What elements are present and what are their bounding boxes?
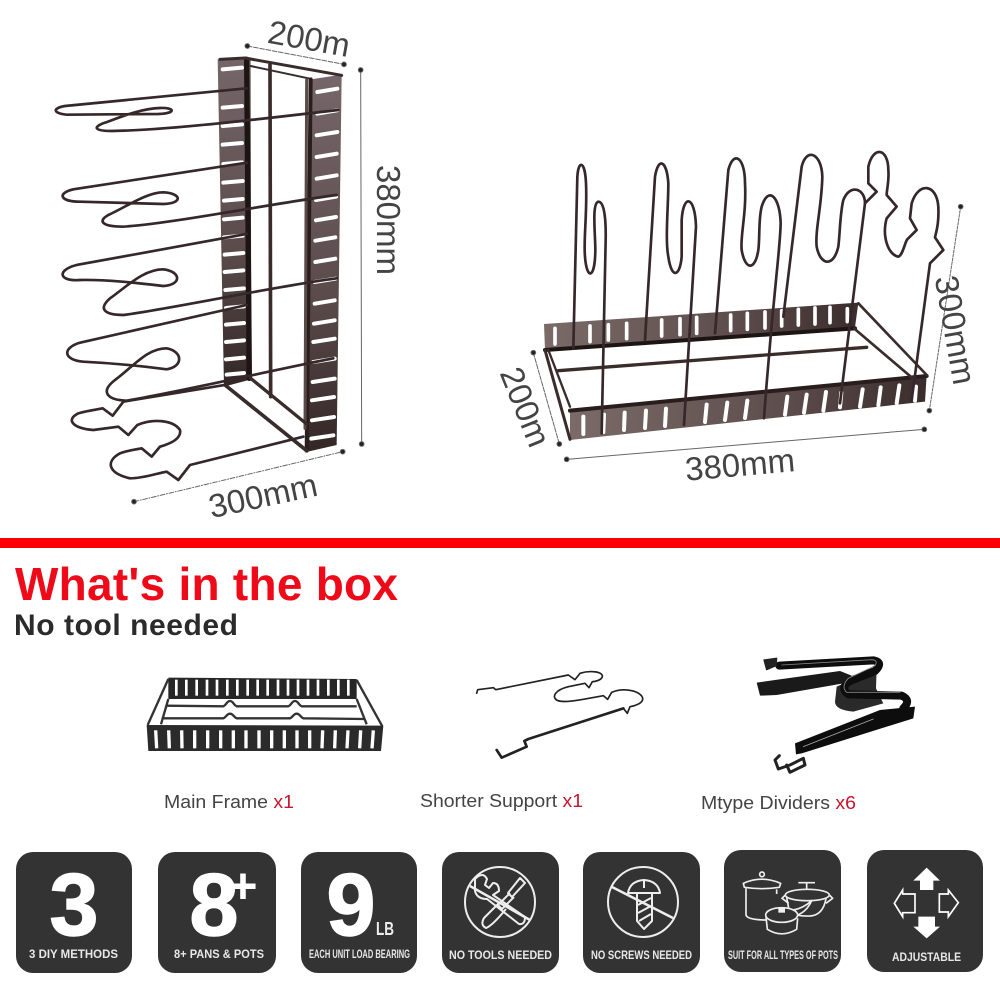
badge: 8+ pans and pots: + — [228, 858, 258, 914]
label: shorter support: Shorter Support x1 — [420, 791, 583, 811]
dimension label: 380mm: 380mm — [684, 441, 796, 488]
badge: 9 lb load bearing: LB — [376, 919, 394, 939]
panel: shorter support item — [420, 672, 643, 811]
icon: crossed tools in prohibition circle — [465, 867, 535, 937]
badge: 8+ pans and pots: 8+ PANS & POTS — [174, 949, 264, 961]
dimension lines — [531, 204, 963, 462]
icon: four-way arrows — [894, 868, 958, 938]
badge: suit for all types of pots — [724, 850, 841, 972]
label: main frame: Main Frame x1 — [164, 792, 294, 812]
icon: m-type dividers — [757, 658, 915, 772]
dimension label: 200m: 200m — [493, 362, 558, 452]
icon: pots — [743, 872, 833, 934]
badge: suit for all types of pots: SUIT FOR ALL TYPES OF POTS — [728, 950, 838, 962]
badge: no screws needed: NO SCREWS NEEDED — [591, 950, 692, 962]
badge: 3 DIY methods: 3 DIY METHODS — [29, 949, 118, 961]
badge: no tools needed — [442, 852, 559, 973]
rack front panel — [570, 375, 927, 440]
dimension label: 300mm: 300mm — [928, 273, 983, 387]
label: m-type dividers: Mtype Dividers x6 — [701, 793, 856, 813]
badge: adjustable: ADJUSTABLE — [892, 952, 961, 964]
title: What's in the box — [15, 558, 398, 610]
dimension label: 300mm: 300mm — [205, 466, 321, 525]
rack wire dividers — [573, 152, 943, 433]
dimension label: 380mm: 380mm — [370, 165, 407, 275]
badge: no tools needed: NO TOOLS NEEDED — [449, 950, 552, 962]
rack near side panel — [307, 75, 342, 452]
badge: 8+ pans and pots — [158, 852, 276, 973]
icon: screw in prohibition circle — [608, 867, 678, 937]
rack wire dividers — [56, 88, 338, 480]
badge: 8+ pans and pots: 8 — [190, 855, 238, 954]
subtitle: No tool needed — [14, 609, 238, 642]
vertical rack illustration — [56, 44, 364, 504]
badge: no screws needed — [583, 852, 700, 973]
dimension lines — [132, 44, 364, 504]
rack frame rails — [220, 58, 342, 451]
badge: adjustable — [867, 850, 983, 972]
badge: 3 DIY methods — [16, 852, 132, 973]
rack frame rails — [545, 303, 927, 439]
horizontal rack illustration — [531, 152, 963, 462]
rack far side panel — [218, 58, 251, 387]
rack back panel — [544, 303, 858, 350]
panel: horizontal rack with dimensions — [493, 152, 983, 488]
icon: shorter support — [477, 672, 643, 758]
badge: 3 DIY methods: 3 — [50, 855, 98, 954]
panel: vertical rack with dimensions — [56, 13, 407, 525]
icon: main frame — [147, 678, 383, 751]
badge: 9 lb load bearing: EACH UNIT LOAD BEARING — [309, 949, 410, 961]
dimension label: 200m: 200m — [265, 13, 353, 64]
panel: main frame item — [147, 678, 383, 812]
badge: 9 lb load bearing — [301, 852, 417, 973]
red divider bar — [0, 538, 1000, 548]
panel: dividers item — [701, 658, 915, 813]
badge: 9 lb load bearing: 9 — [327, 855, 375, 954]
